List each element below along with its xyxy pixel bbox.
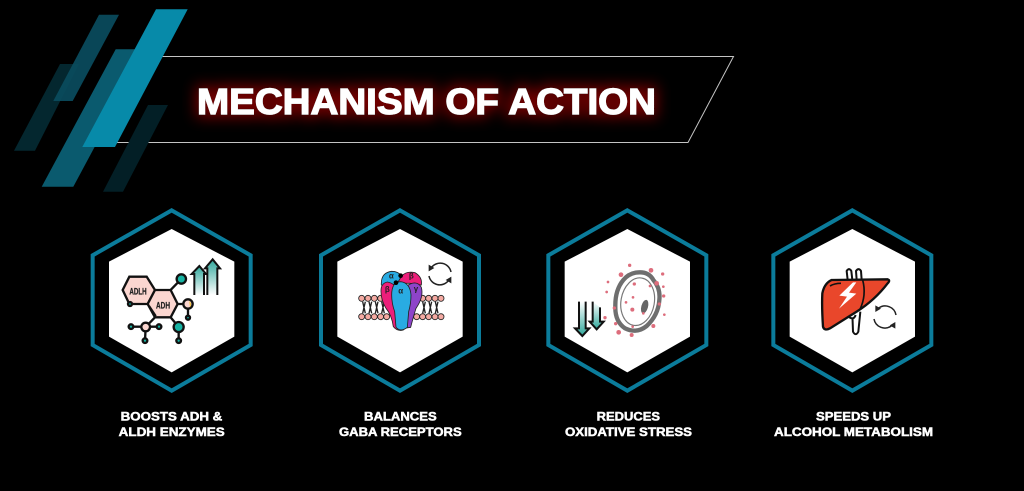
label: GABA RECEPTORS (339, 425, 462, 439)
icon: GABA receptor in membrane: α (389, 272, 394, 281)
icon: cycle arrows (874, 305, 896, 329)
panel: speeds up alcohol metabolism (773, 210, 933, 439)
icon: GABA receptor in membrane: β (409, 272, 414, 281)
label: REDUCES (597, 410, 660, 424)
label: SPEEDS UP (816, 410, 891, 424)
icon: enzyme molecule with up arrows: ADLH (129, 287, 147, 297)
icon: GABA receptor in membrane (359, 263, 451, 330)
panel: boosts ADH and ALDH enzymes (93, 210, 251, 439)
decorative slanted bars (14, 9, 188, 192)
icon: stressed cell with down arrows (575, 264, 666, 337)
label (339, 410, 462, 439)
hexagon frame 1 (93, 210, 251, 391)
hexagon frame 4 (773, 210, 931, 391)
panel: balances GABA receptors (321, 210, 479, 439)
hexagon frame 3 (548, 210, 706, 391)
label (774, 410, 933, 439)
label (119, 410, 225, 439)
label: ALCOHOL METABOLISM (774, 425, 933, 439)
icon: liver with lightning bolt and cycle arrows (822, 269, 896, 334)
icon: enzyme molecule with up arrows (123, 259, 220, 343)
icon: GABA receptor in membrane: β (385, 285, 390, 294)
label: BOOSTS ADH & (121, 410, 223, 424)
hexagon frame 2 (321, 210, 479, 391)
panel: reduces oxidative stress (548, 210, 706, 439)
title banner outline (115, 56, 734, 142)
label: BALANCES (364, 410, 437, 424)
label: ALDH ENZYMES (119, 425, 225, 439)
label (565, 410, 692, 439)
icon: GABA receptor in membrane: α (398, 287, 403, 296)
icon: enzyme molecule with up arrows: ADH (156, 300, 170, 310)
title: MECHANISM OF ACTION (197, 81, 656, 122)
label: OXIDATIVE STRESS (565, 425, 692, 439)
icon: cycle arrows (429, 263, 451, 285)
icon: GABA receptor in membrane: γ (414, 284, 419, 293)
